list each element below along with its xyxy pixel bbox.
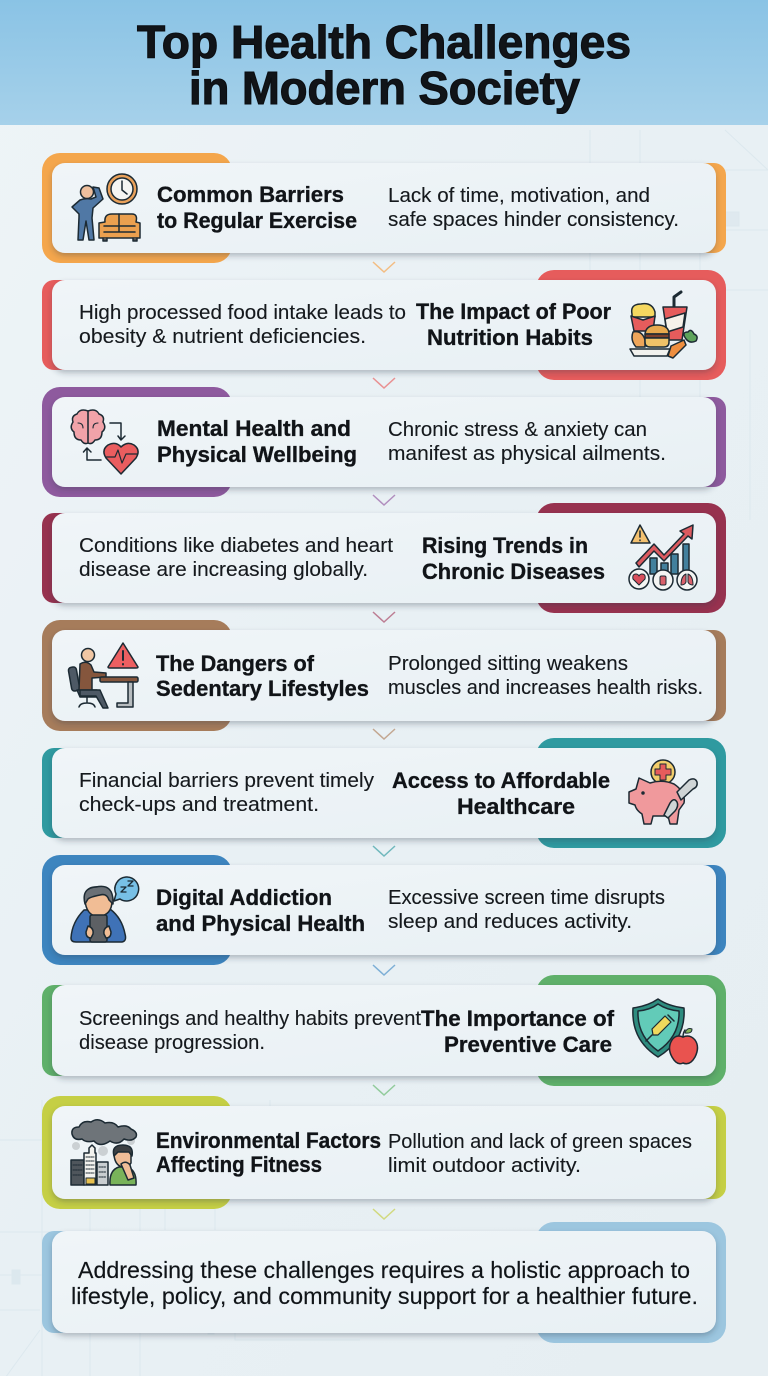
heading: Digital Addiction (156, 885, 332, 910)
icon: piggy bank and coin (629, 760, 697, 824)
arrow (373, 1209, 395, 1219)
icon: fast food (630, 292, 697, 358)
description: Pollution and lack of green spaces (388, 1130, 692, 1153)
heading: Healthcare (457, 794, 575, 819)
header banner (0, 0, 768, 125)
arrow (373, 965, 395, 975)
heading: The Dangers of (156, 651, 314, 676)
description: High processed food intake leads to (79, 301, 406, 324)
heading: to Regular Exercise (157, 208, 357, 233)
title: Top Health Challenges (137, 16, 631, 68)
heading: The Impact of Poor (416, 299, 611, 324)
icon: person on phone with sleep bubble (71, 877, 139, 942)
heading: Environmental Factors (156, 1128, 381, 1153)
description: Screenings and healthy habits prevent (79, 1007, 421, 1030)
description: Prolonged sitting weakens (388, 652, 628, 675)
panel: environmental factors affecting fitness (42, 1096, 726, 1209)
conclusion text: lifestyle, policy, and community support for a healthier future. (71, 1283, 698, 1309)
description: Lack of time, motivation, and (388, 184, 650, 207)
arrow (373, 378, 395, 388)
description: disease are increasing globally. (79, 558, 368, 581)
arrow (373, 495, 395, 505)
heading: and Physical Health (156, 911, 365, 936)
heading: Rising Trends in (422, 533, 588, 558)
arrow (373, 1085, 395, 1095)
title: in Modern Society (189, 62, 580, 114)
icon: person at desk with warning (68, 643, 138, 708)
heading: Preventive Care (444, 1032, 612, 1057)
description: muscles and increases health risks. (388, 676, 703, 699)
icon: person, clock and sofa (72, 174, 140, 241)
icon: rising chart (629, 525, 697, 590)
description: Financial barriers prevent timely (79, 769, 375, 792)
icon: brain and heart (71, 410, 138, 474)
panel: digital addiction and physical health (42, 855, 726, 965)
arrow (373, 729, 395, 739)
arrow (373, 612, 395, 622)
panel: rising trends in chronic diseases (42, 503, 726, 613)
heading: Mental Health and (157, 416, 351, 441)
conclusion text: Addressing these challenges requires a holistic approach to (78, 1257, 690, 1283)
heading: Sedentary Lifestyles (156, 676, 369, 701)
heading: The Importance of (421, 1006, 614, 1031)
description: Chronic stress & anxiety can (388, 418, 647, 441)
icon: shield and apple (633, 999, 698, 1064)
description: limit outdoor activity. (388, 1154, 581, 1177)
heading: Common Barriers (157, 182, 344, 207)
heading: Affecting Fitness (156, 1152, 322, 1177)
panel: mental health and physical wellbeing (42, 387, 726, 497)
description: safe spaces hinder consistency. (388, 208, 679, 231)
panel: dangers of sedentary lifestyles (42, 620, 726, 731)
description: Conditions like diabetes and heart (79, 534, 393, 557)
panel: conclusion (42, 1222, 726, 1343)
heading: Chronic Diseases (422, 559, 605, 584)
heading: Nutrition Habits (427, 325, 593, 350)
heading: Access to Affordable (392, 768, 610, 793)
panel: access to affordable healthcare (42, 738, 726, 848)
panel: impact of poor nutrition habits (42, 270, 726, 380)
description: obesity & nutrient deficiencies. (79, 325, 366, 348)
heading: Physical Wellbeing (157, 442, 357, 467)
panel: common barriers to regular exercise (42, 153, 726, 263)
description: Excessive screen time disrupts (388, 886, 665, 909)
icon: smog, city and coughing man (71, 1120, 136, 1185)
description: manifest as physical ailments. (388, 442, 666, 465)
description: check-ups and treatment. (79, 793, 319, 816)
panel: importance of preventive care (42, 975, 726, 1086)
arrow (373, 262, 395, 272)
description: disease progression. (79, 1031, 265, 1054)
arrow (373, 846, 395, 856)
description: sleep and reduces activity. (388, 910, 632, 933)
